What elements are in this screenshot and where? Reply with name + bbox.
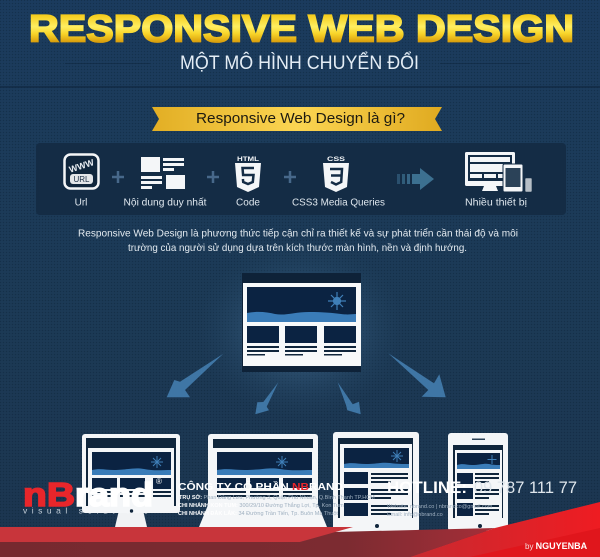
arrow: to tablet bbox=[338, 382, 361, 414]
signature: by NGUYENBA bbox=[525, 541, 588, 551]
glow behind main layout bbox=[196, 242, 406, 418]
icon: url: WWW bbox=[68, 157, 96, 175]
watermark: hotline: HOTLINE: bbox=[387, 478, 467, 497]
subtitle: MỘT MÔ HÌNH CHUYỂN ĐỔI bbox=[180, 52, 419, 74]
device: tablet bbox=[333, 432, 419, 532]
watermark: nBrand logo: nB bbox=[23, 476, 75, 513]
icon: sun bbox=[328, 292, 346, 310]
ribbon heading bbox=[152, 107, 442, 131]
arrow: to monitor bbox=[167, 354, 223, 397]
watermark: company details: CÔNG TY CỔ PHẦN NB RAND bbox=[178, 480, 343, 493]
watermark: nBrand logo: visual solutions bbox=[23, 506, 153, 516]
watermark: nBrand logo bbox=[23, 476, 162, 516]
watermark: nBrand logo: ® bbox=[156, 477, 162, 486]
panel: formula bbox=[36, 143, 566, 215]
label: content: Nội dung duy nhất bbox=[124, 196, 207, 208]
icon: css3: CSS bbox=[327, 156, 346, 163]
arrow: to laptop bbox=[255, 382, 278, 414]
icon: content blocks bbox=[141, 157, 185, 189]
description text bbox=[78, 228, 518, 254]
title: RESPONSIVE WEB DESIGN bbox=[29, 8, 574, 50]
description text: Responsive Web Design là phương thức tiếp cận chỉ ra thiết kế và sự phát triển cần thái độ và môi bbox=[78, 228, 518, 240]
ribbon heading: Responsive Web Design là gì? bbox=[196, 110, 405, 127]
icon: html5 bbox=[235, 156, 261, 192]
device: desktop monitor bbox=[82, 434, 180, 527]
footer red bands bbox=[0, 502, 600, 557]
icon: url: URL bbox=[73, 175, 90, 184]
label: css3: CSS3 Media Queries bbox=[292, 198, 385, 208]
watermark: company details bbox=[178, 480, 375, 517]
watermark: hotline: Email: info@nbrand.co bbox=[387, 512, 443, 518]
label: url: Url bbox=[75, 198, 87, 208]
icon: devices bbox=[465, 152, 532, 192]
watermark: nBrand logo: rand bbox=[75, 476, 153, 513]
description text: trường của người sử dụng dựa trên kích thước màn hình, nền và định hướng. bbox=[128, 242, 467, 254]
arrow: result bbox=[397, 168, 434, 190]
watermark: hotline: 09 787 111 77 bbox=[474, 479, 577, 497]
icon: html5: HTML bbox=[237, 156, 259, 163]
label: devices: Nhiều thiết bị bbox=[465, 196, 527, 208]
main layout wireframe bbox=[242, 273, 361, 372]
watermark: hotline: Website: nbrand.co | nbrandco@gmail.com bbox=[387, 504, 493, 510]
watermark: company details: CHI NHÁNH ĐẮK LẮK: 34 Đường Trần Tiến, Tp. Buôn Ma Thuột bbox=[178, 509, 338, 517]
watermark: company details: TRỤ SỞ: Phan Đăng Lưu, Phường 3, Quận Phú Nhuận, Q.Bình Thạnh TP.HCM bbox=[179, 494, 375, 501]
device: phone bbox=[448, 433, 508, 531]
icon: url bbox=[64, 154, 98, 188]
watermark: company details: CHI NHÁNH KON TUM: 300/29/10 Đường Thắng Lợi, Tp. Kon Tum bbox=[178, 502, 344, 509]
icon: css3 bbox=[323, 156, 349, 192]
watermark: hotline bbox=[387, 478, 577, 518]
label: code: Code bbox=[236, 198, 260, 208]
icon: plus bbox=[112, 171, 296, 183]
device: laptop bbox=[199, 434, 327, 527]
arrow: to phone bbox=[388, 353, 446, 397]
